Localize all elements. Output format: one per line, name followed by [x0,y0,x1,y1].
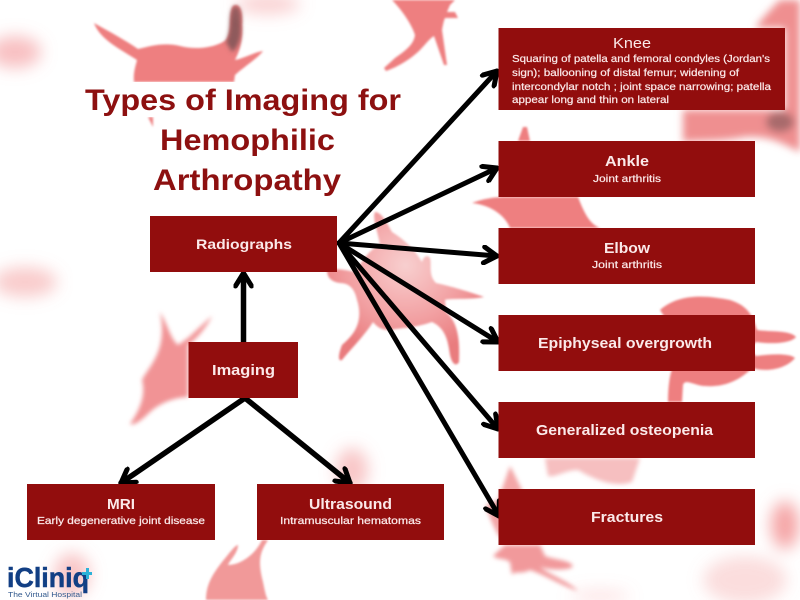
title: Arthropathy [153,164,341,197]
box: knee: Squaring of patella and femoral condyles (Jordan's [512,54,770,65]
box: epiphyseal overgrowth: Epiphyseal overgrowth [538,335,712,352]
box: ankle: Joint arthritis [593,174,661,185]
box: imaging: Imaging [212,362,275,379]
box: ultrasound [257,484,444,540]
box: elbow [498,228,755,284]
box: generalized osteopenia [498,402,755,458]
box: knee: appear long and thin on lateral [512,95,669,106]
shading on top platelet arm [226,6,241,52]
arrow: imaging to ultrasound [245,398,350,483]
title [85,84,401,197]
box: elbow: Joint arthritis [592,260,662,271]
box: fractures: Fractures [591,509,663,526]
title: Hemophilic [160,124,335,157]
box: ankle: Ankle [605,153,649,170]
box: generalized osteopenia: Generalized osteopenia [536,422,714,439]
logo: iCliniq: The Virtual Hospital [8,590,82,599]
box: ankle [498,141,755,197]
arrow: imaging to radiographs [241,273,246,342]
box: epiphyseal overgrowth [498,315,755,371]
box: elbow: Elbow [604,240,650,257]
arrows: radiographs to findings [339,71,499,516]
white panel behind title [84,82,402,117]
box: ultrasound: Ultrasound [309,496,392,513]
title: Types of Imaging for [85,84,401,117]
box: MRI: Early degenerative joint disease [37,515,205,527]
platelet: center [327,212,484,364]
box: imaging [188,342,298,398]
box: knee: intercondylar notch ; joint space narrowing; patella [512,82,771,93]
box: MRI [27,484,215,540]
box: knee: sign); ballooning of distal femur; widening of [512,68,739,79]
box: radiographs [150,216,337,272]
box: knee: Knee [613,36,651,52]
box: knee [498,28,785,110]
box: radiographs: Radiographs [196,236,292,252]
box: MRI: MRI [107,496,135,513]
box: ultrasound: Intramuscular hematomas [280,515,421,527]
arrow: imaging to MRI [121,398,245,483]
box: fractures [498,489,755,545]
logo: iCliniq: iCliniq [7,562,89,593]
